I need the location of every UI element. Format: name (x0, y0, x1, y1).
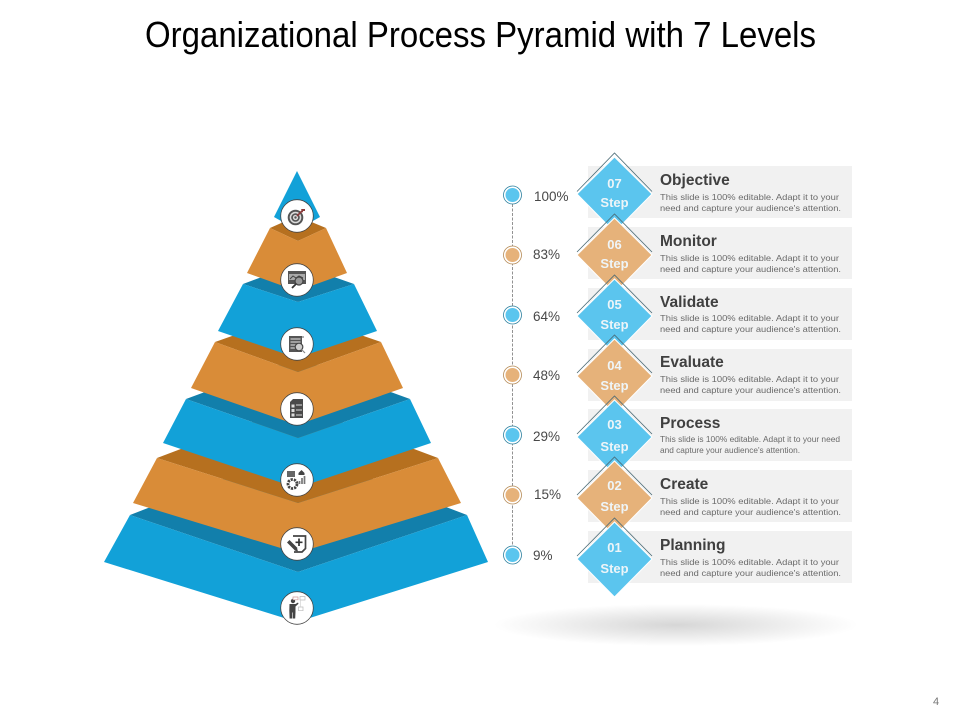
row 03 process (577, 396, 852, 475)
row 06 monitor: Step (600, 256, 629, 271)
dot 48% (504, 366, 522, 384)
row 04 evaluate: need and capture your audience's attention. (660, 385, 841, 395)
row 02 create: Step (600, 499, 629, 514)
row 05 validate (577, 275, 852, 354)
icon: monitor dashboard (281, 264, 313, 296)
row 01 planning: 01 (607, 540, 622, 555)
page number: 4 (933, 696, 939, 708)
level 5 validate (218, 264, 377, 358)
level 4 evaluate (191, 313, 403, 425)
row 03 process: Step (600, 439, 629, 454)
row 02 create: Create (660, 476, 709, 493)
percentage labels: 9% (533, 548, 553, 563)
row 07 objective: need and capture your audience's attention. (660, 203, 841, 213)
dot 9% (504, 546, 522, 564)
icon: target (281, 200, 313, 232)
row 05 validate: This slide is 100% editable. Adapt it to your (660, 313, 839, 323)
row 06 monitor: need and capture your audience's attention. (660, 264, 841, 274)
row 04 evaluate: This slide is 100% editable. Adapt it to your (660, 374, 839, 384)
row 02 create: 02 (607, 478, 622, 493)
row 05 validate: 05 (607, 297, 622, 312)
percentage labels: 64% (533, 309, 560, 324)
row 01 planning: This slide is 100% editable. Adapt it to your (660, 557, 839, 567)
dot 83% (504, 246, 522, 264)
row 06 monitor: This slide is 100% editable. Adapt it to your (660, 253, 839, 263)
pyramid chart (104, 171, 488, 624)
row 04 evaluate: Evaluate (660, 354, 724, 371)
row 01 planning (577, 518, 852, 597)
percentage labels (533, 189, 569, 563)
row 05 validate: Step (600, 317, 629, 332)
row 07 objective (577, 153, 852, 232)
percentage labels: 48% (533, 368, 560, 383)
percentage labels: 29% (533, 429, 560, 444)
row 01 planning: Planning (660, 537, 725, 554)
row 02 create (577, 457, 852, 536)
level 3 process (163, 358, 431, 488)
icon: document review (281, 328, 313, 360)
row 05 validate: need and capture your audience's attention. (660, 324, 841, 334)
row 02 create: need and capture your audience's attention. (660, 507, 841, 517)
ground shadow (494, 604, 858, 646)
dot 15% (504, 486, 522, 504)
timeline (504, 186, 522, 564)
dot 100% (504, 186, 522, 204)
row 04 evaluate (577, 335, 852, 414)
row 04 evaluate: 04 (607, 358, 622, 373)
row 02 create: This slide is 100% editable. Adapt it to your (660, 496, 839, 506)
level 1 planning (104, 450, 488, 622)
icon: presenter (281, 592, 313, 624)
icon: add document (281, 528, 313, 560)
row 03 process: 03 (607, 417, 622, 432)
icon: checklist (281, 393, 313, 425)
dot 29% (504, 426, 522, 444)
icon: gear and chart (281, 464, 313, 496)
row 07 objective: This slide is 100% editable. Adapt it to your (660, 192, 839, 202)
percentage labels: 83% (533, 247, 560, 262)
percentage labels: 100% (534, 189, 569, 204)
percentage labels: 15% (534, 487, 561, 502)
row 03 process: This slide is 100% editable. Adapt it to your need (660, 434, 840, 444)
row 07 objective: Objective (660, 172, 730, 189)
row 04 evaluate: Step (600, 378, 629, 393)
row 03 process: Process (660, 415, 720, 432)
row 06 monitor: 06 (607, 237, 622, 252)
title: Organizational Process Pyramid with 7 Levels (145, 14, 816, 55)
row 03 process: and capture your audience's attention. (660, 445, 800, 455)
level 6 monitor (247, 216, 347, 291)
level 2 create (133, 405, 461, 553)
row 01 planning: need and capture your audience's attention. (660, 568, 841, 578)
row 01 planning: Step (600, 561, 629, 576)
row 07 objective: 07 (607, 176, 622, 191)
level 7 objective (274, 171, 320, 230)
dot 64% (504, 306, 522, 324)
row 06 monitor (577, 214, 852, 293)
row 06 monitor: Monitor (660, 233, 717, 250)
row 05 validate: Validate (660, 294, 719, 311)
row 07 objective: Step (600, 195, 629, 210)
